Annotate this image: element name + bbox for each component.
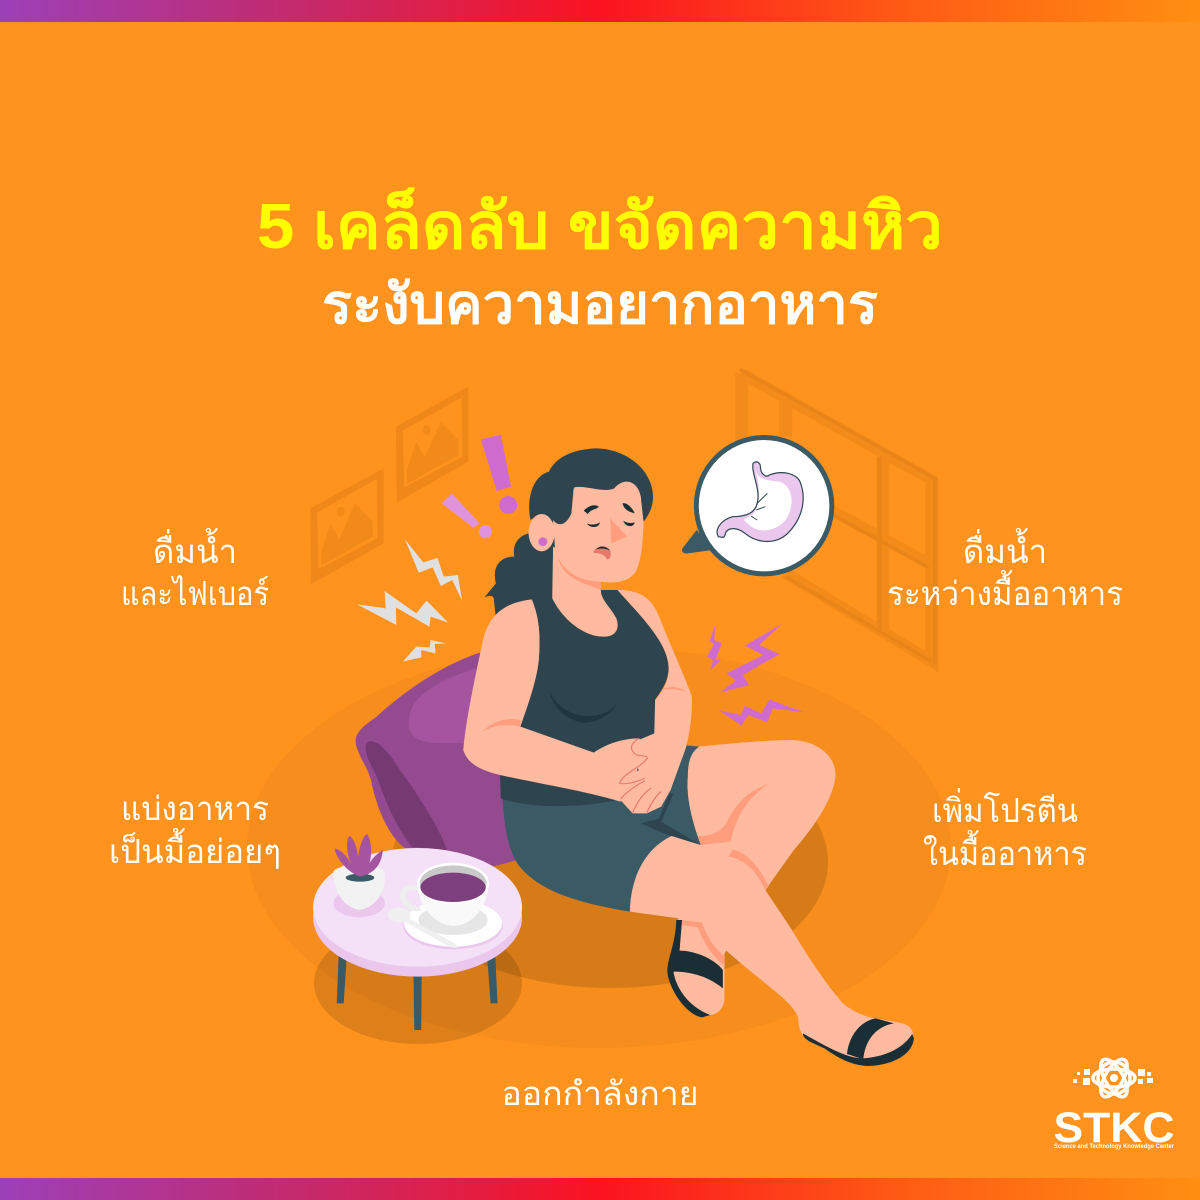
plant xyxy=(333,834,385,910)
ear xyxy=(529,514,555,551)
label: add protein xyxy=(923,788,1087,872)
speech bubble with stomach xyxy=(682,435,834,576)
plant pot shadow xyxy=(333,889,385,917)
label: drink water and fibre: และไฟเบอร์ xyxy=(121,575,269,612)
logo dots xyxy=(1073,1069,1153,1085)
arm creases xyxy=(482,687,686,732)
back sandal xyxy=(667,920,723,1017)
eyebrows and eyes xyxy=(584,503,635,527)
table xyxy=(313,834,522,1030)
tank crease xyxy=(549,690,618,723)
table legs xyxy=(337,953,498,1030)
finger lines xyxy=(620,738,661,813)
label: drink water between meals: ดื่มน้ำ xyxy=(963,528,1047,570)
woman xyxy=(463,448,914,1066)
spoon xyxy=(388,908,457,948)
arm right and hand xyxy=(618,590,692,813)
label: drink water between meals xyxy=(887,528,1123,612)
title line 1: 5 เคล็ดลับ ขจัดความหิว xyxy=(257,188,943,262)
title xyxy=(257,188,943,335)
picture frame right xyxy=(396,387,468,503)
logo tagline: Science and Technology Knowledge Center xyxy=(1054,1144,1175,1150)
label: drink water between meals: ระหว่างมื้ออาหาร xyxy=(887,570,1123,612)
front leg xyxy=(630,836,913,1059)
floor ellipse xyxy=(247,646,951,1048)
table shadow xyxy=(314,922,522,1044)
label: add protein: เพิ่มโปรตีน xyxy=(932,788,1078,829)
leg creases xyxy=(682,784,769,965)
label: split meals: แบ่งอาหาร xyxy=(121,790,269,827)
window on wall xyxy=(740,369,935,664)
saucer xyxy=(403,900,503,949)
shorts xyxy=(502,743,701,912)
shorts fold xyxy=(641,793,701,845)
hair xyxy=(529,448,653,526)
ponytail xyxy=(484,533,555,618)
neck xyxy=(552,547,618,637)
purple lightning bolts xyxy=(707,623,804,726)
mouth xyxy=(593,546,611,559)
logo wordmark: STKC xyxy=(1054,1104,1174,1152)
label: split meals xyxy=(109,790,281,870)
cushion xyxy=(356,652,540,870)
title line 2: ระงับความอยากอาหาร xyxy=(322,273,878,335)
grey lightning bolts xyxy=(357,539,462,662)
arm left xyxy=(463,599,647,802)
top gradient bar xyxy=(0,0,1200,22)
face xyxy=(553,482,644,582)
label: drink water and fibre: ดื่มน้ำ xyxy=(153,528,237,570)
icon: atom xyxy=(1093,1055,1135,1101)
coffee cup xyxy=(403,863,489,926)
table top xyxy=(313,858,522,977)
label: add protein: ในมื้ออาหาร xyxy=(923,830,1087,872)
earring xyxy=(538,537,547,546)
tank top xyxy=(500,590,669,806)
label: drink water and fibre xyxy=(121,528,269,612)
front sandal xyxy=(803,1018,914,1066)
nose xyxy=(610,518,627,543)
illustration: hungry woman scene xyxy=(310,369,935,664)
label: split meals: เป็นมื้อย่อยๆ xyxy=(109,828,281,870)
logo STKC xyxy=(1054,1055,1175,1152)
neck shadow xyxy=(558,557,601,589)
bent leg and foot xyxy=(673,740,836,1015)
shadow under woman xyxy=(392,736,828,988)
icon: stomach xyxy=(717,462,803,541)
bottom gradient bar xyxy=(0,1178,1200,1200)
label: exercise: ออกกำลังกาย xyxy=(502,1075,698,1112)
exclamation marks xyxy=(442,435,517,538)
picture frame left xyxy=(310,468,384,584)
